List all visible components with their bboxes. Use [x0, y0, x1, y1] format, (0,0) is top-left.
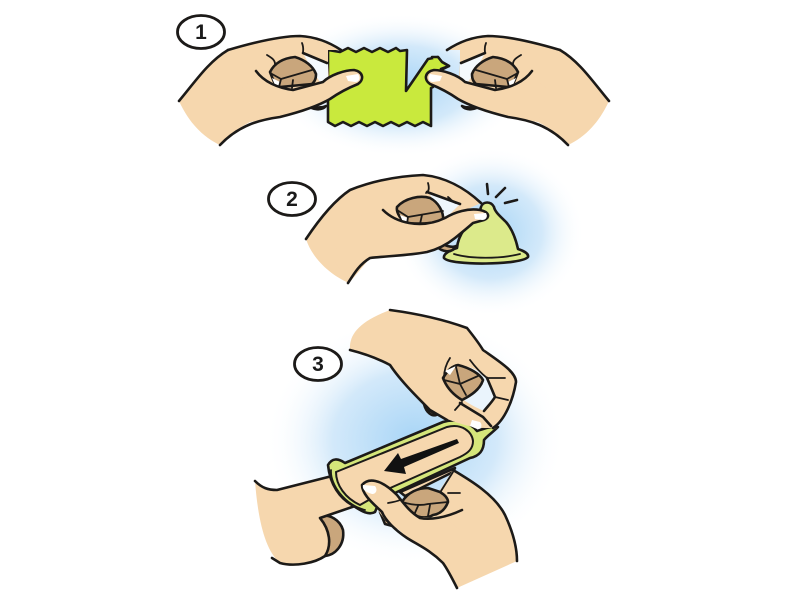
step 1 illustration: hands tearing packet: [179, 36, 609, 145]
left hand: [179, 36, 362, 145]
lower hand: [362, 470, 517, 588]
step 2 illustration: hand pinching the tip: [306, 175, 528, 283]
upper hand: [350, 310, 516, 429]
hand: [306, 175, 488, 283]
step 2 number badge: [268, 182, 316, 216]
shaft strip below tube: [400, 468, 455, 496]
sheath with rim: [444, 202, 528, 264]
background glow: step 2: [395, 147, 585, 317]
step 1 number badge: [178, 16, 224, 48]
sheath tube: [328, 420, 498, 513]
step 3 illustration: rolling down on a model: [255, 310, 517, 588]
base of model: [255, 474, 360, 565]
step 2 number badge: 2: [286, 188, 298, 211]
direction arrow: [384, 439, 459, 474]
step 3 number badge: 3: [312, 353, 324, 376]
step 1 number badge: 1: [195, 21, 207, 44]
step 3 number badge: [294, 348, 342, 380]
background glow: step 1: [275, 13, 525, 157]
green foil packet: [328, 48, 449, 126]
spark lines: [487, 184, 517, 203]
right hand: [426, 36, 609, 145]
background glow: step 3: [265, 315, 565, 565]
torn packet flap: [432, 57, 449, 69]
